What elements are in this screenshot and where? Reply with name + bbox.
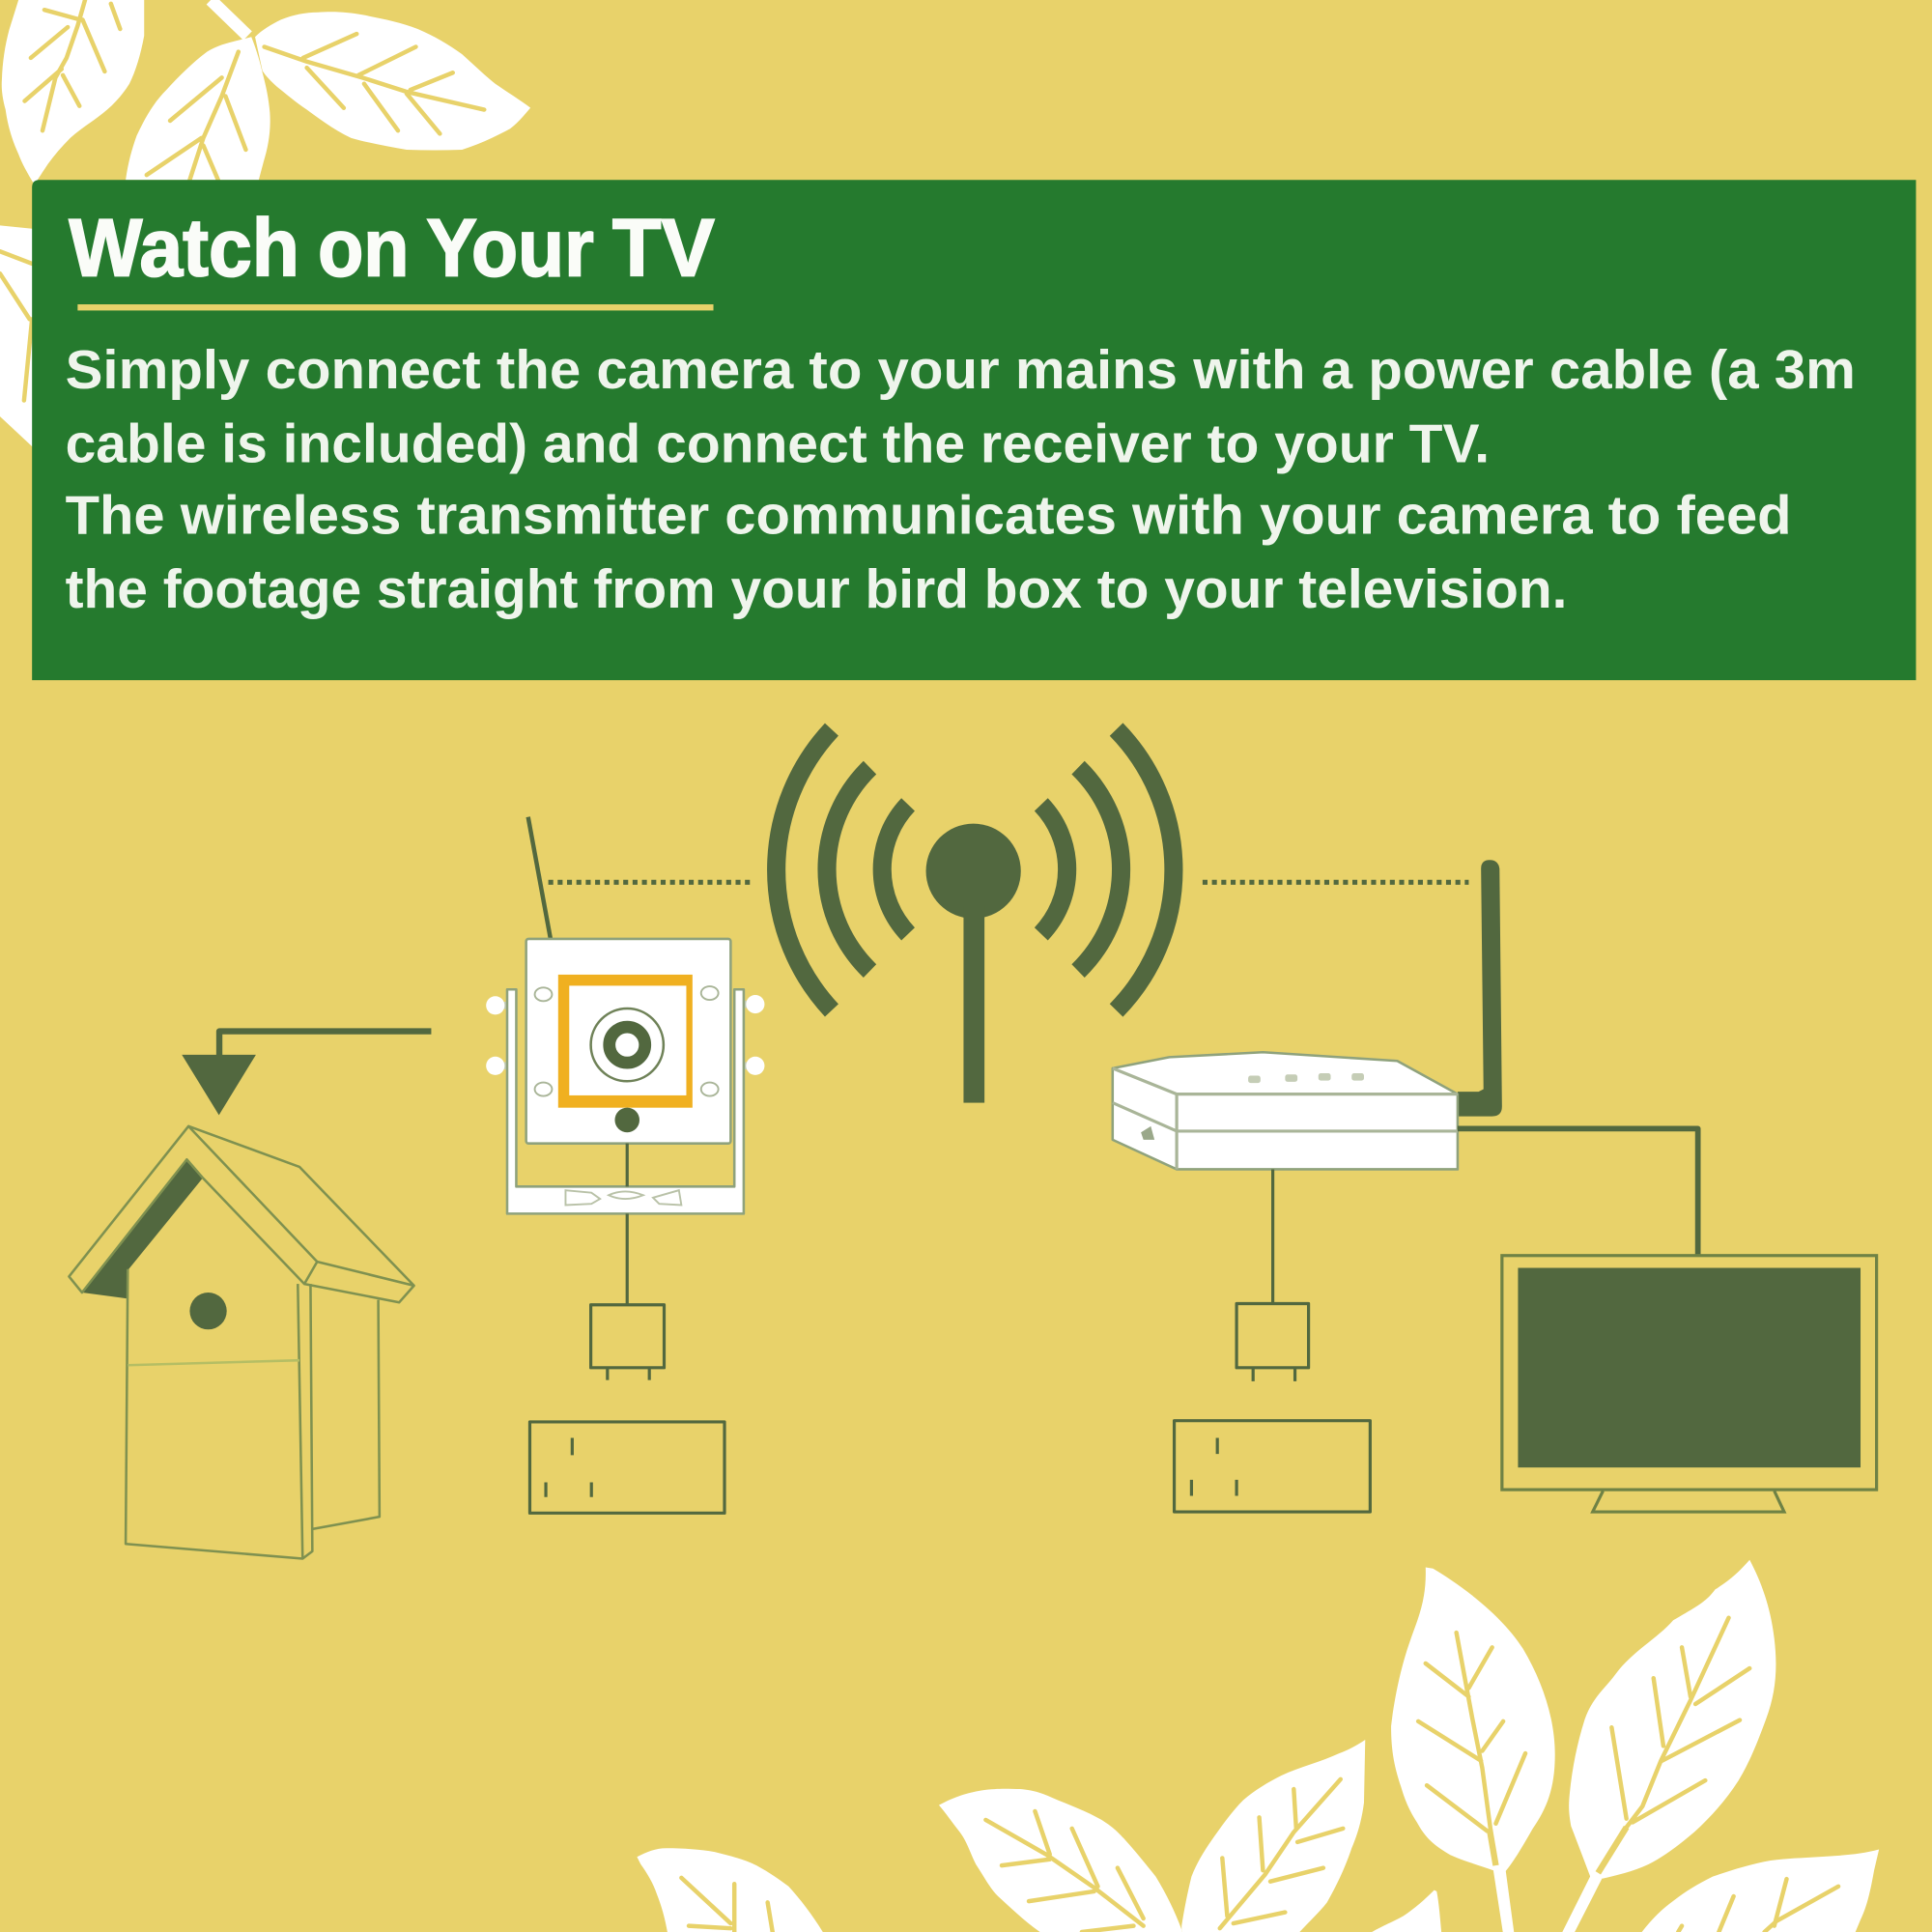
icon: receiver [1113, 860, 1502, 1169]
title [69, 203, 715, 294]
cable: receiver to plug [1271, 1169, 1274, 1305]
title: TV [612, 203, 715, 294]
lens [591, 1009, 664, 1081]
plug: camera [591, 1305, 665, 1380]
leaf: left edge behind panel [0, 225, 37, 451]
orange lens frame [558, 975, 693, 1108]
body text: the footage straight from your bird box to your television. [66, 558, 1567, 619]
icon: wireless signal mast [777, 729, 1174, 1103]
camera body [526, 939, 730, 1144]
icon: television [1502, 1256, 1877, 1512]
camera antenna [528, 817, 551, 940]
receiver port [1141, 1126, 1154, 1140]
mounting bracket [507, 989, 744, 1213]
title: on [318, 203, 409, 294]
icon: arrow to bird box [182, 1032, 431, 1115]
panel: watch on your TV [32, 180, 1916, 680]
plug: receiver [1236, 1303, 1309, 1381]
cable: camera to plug [626, 1144, 628, 1305]
title: Watch [69, 203, 299, 294]
title underline [77, 304, 714, 310]
body text: cable is included) and connect the receiver to your TV. [66, 412, 1490, 473]
receiver lights [1248, 1073, 1364, 1083]
body text [66, 339, 1856, 619]
body text: The wireless transmitter communicates with your camera to feed [66, 484, 1792, 545]
socket: receiver [1175, 1421, 1370, 1512]
icon: camera [486, 817, 764, 1213]
body text: Simply connect the camera to your mains with a power cable (a 3m [66, 339, 1856, 400]
cable: receiver to TV [1458, 1128, 1698, 1257]
icon: bird box [69, 1126, 414, 1559]
leaves: bottom plant [637, 1560, 1879, 1932]
bracket slots [565, 1190, 681, 1205]
title: Your [426, 203, 594, 294]
dotted link: mast to receiver [1203, 880, 1468, 884]
receiver box [1113, 1052, 1458, 1169]
socket: camera [529, 1422, 724, 1513]
receiver antenna [1458, 860, 1502, 1117]
dotted link: camera to mast [549, 880, 753, 884]
leaves: top left cluster [2, 0, 530, 185]
mounting knobs [486, 995, 764, 1075]
screw holes [535, 986, 719, 1096]
